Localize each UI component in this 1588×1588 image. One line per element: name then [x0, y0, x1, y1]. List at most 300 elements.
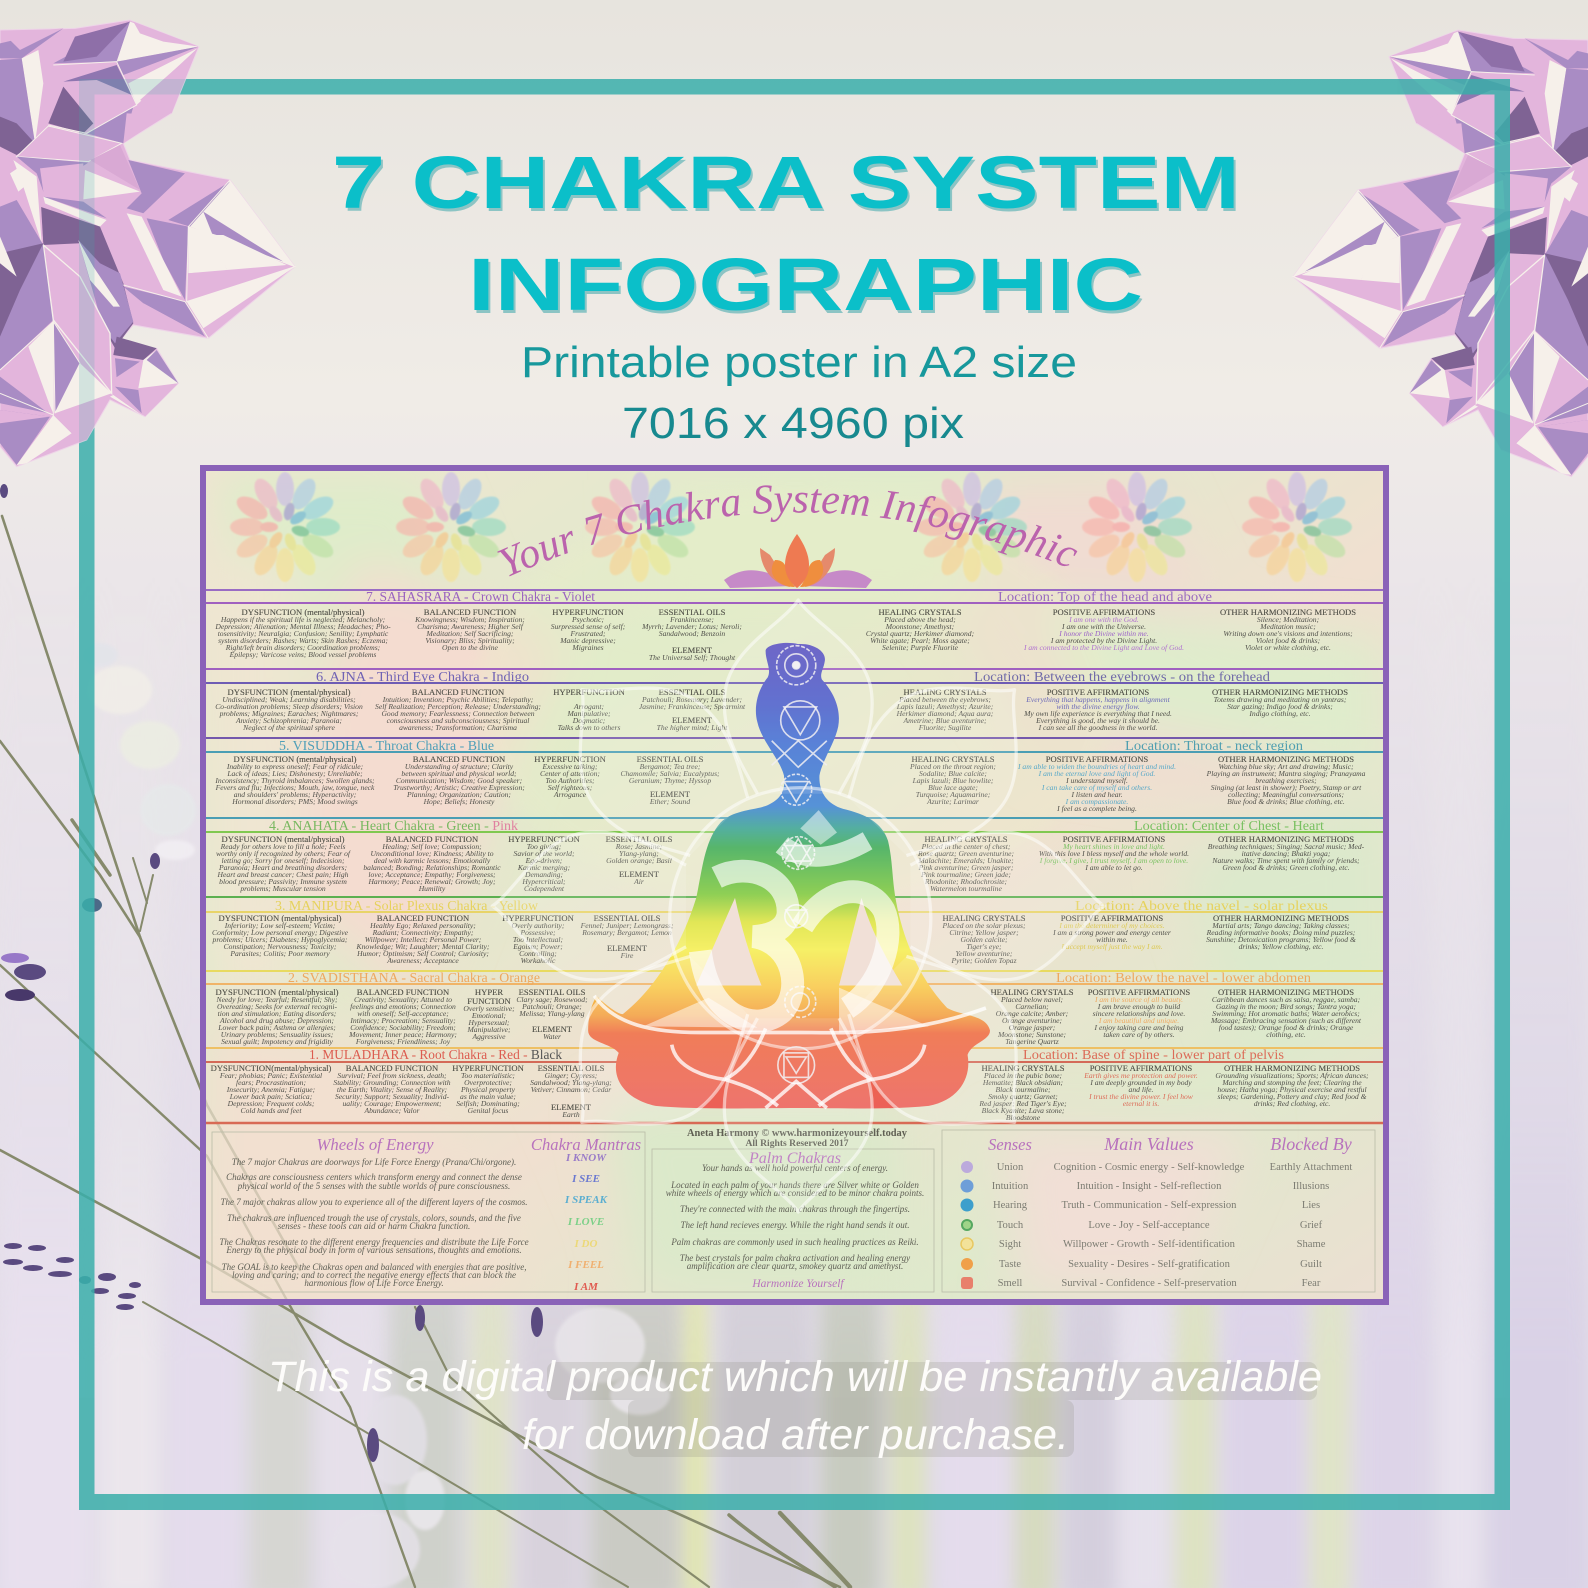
section 1 text: HYPERFUNCTION [452, 1063, 525, 1073]
chakra row icons [960, 1161, 974, 1289]
section 7 text: Sandalwood; Benzoin [659, 629, 725, 638]
panel: senses, values, blocks table: Hearing [993, 1200, 1028, 1211]
section 5 text: I am compassionate. [1065, 797, 1128, 806]
section 3 text: Rosemary; Bergamot; Lemon [581, 928, 672, 937]
subtitle: Printable poster in A2 size [521, 338, 1077, 387]
section headings: 2. SVADISTHANA - Sacral Chakra - Orange [288, 970, 540, 985]
section 6 text: POSITIVE AFFIRMATIONS [1047, 687, 1149, 697]
section 2 text: Carnelian; [1015, 1002, 1049, 1011]
section 7 text: I am protected by the Divine Light. [1050, 636, 1157, 645]
section 2 text: Moonstone; Sunstone; [997, 1030, 1067, 1039]
section 3 text: Pyrite; Golden Topaz [950, 956, 1017, 965]
section 2 text: HEALING CRYSTALS [990, 987, 1074, 997]
section 5 text: DYSFUNCTION (mental/physical) [234, 754, 357, 764]
panel: palm chakras: amplification are clear quartz, smokey quartz and amethyst. [687, 1261, 903, 1271]
panel: senses, values, blocks table: Blocked By [1270, 1134, 1352, 1154]
section 4 text: blood pressure; Passivity; Immune system [219, 877, 347, 886]
panel: palm chakras: Palm Chakras [748, 1150, 841, 1167]
section headings: Location: Between the eyebrows - on the forehead [974, 669, 1270, 684]
section 3 text: I accept myself just the way I am. [1060, 942, 1163, 951]
panel: palm chakras: Located in each palm of your hands there are Silver white or Golden [670, 1180, 919, 1190]
panel: senses, values, blocks table: Cognition - Cosmic energy - Self-knowledge [1054, 1162, 1245, 1173]
section 6 text: Star gazing; Indigo food & drinks; [1227, 702, 1333, 711]
section 7 text: Depression; Alienation; Mental Illness; Headaches; Pho- [214, 622, 391, 631]
section 3 text: Humor; Optimism; Self Control; Curiosity; [356, 949, 489, 958]
panel: senses, values, blocks table: Sexuality - Desires - Self-gratification [1068, 1259, 1231, 1270]
section headings: Location: Below the navel - lower abdomen [1056, 970, 1311, 985]
section 2 text: Movement; Inner peace; Harmony; [348, 1030, 457, 1039]
section 1 text: the Earth; Vitality; Sense of Reality; [337, 1085, 448, 1094]
section headings: Location: Base of spine - lower part of pelvis [1023, 1047, 1284, 1062]
section 1 text: Cold hands and feet [241, 1106, 302, 1115]
section 4 text: Demanding; [524, 870, 563, 879]
section 6 text: Intuition; Invention; Psychic Abilities; Telepathy; [382, 695, 534, 704]
section 4 text: Rose; Jasmine; [615, 842, 663, 851]
section 4 text: itative dancing; Bhakti yoga; [1242, 849, 1331, 858]
lower lotus petals [594, 996, 986, 1108]
section 4 text: problems; Muscular tension [239, 884, 326, 893]
section 3 text: Overly authority; [512, 921, 565, 930]
panel: chakra mantras: I KNOW [565, 1152, 607, 1164]
section 1 text: eternal it is. [1123, 1099, 1159, 1108]
section 6 text: Co-ordination problems; Sleep disorders; Vision [215, 702, 363, 711]
section 1 text: Survival; Feel from sickness, death; [337, 1071, 447, 1080]
panel: palm chakras: They're connected with the main chakras through the fingertips. [680, 1204, 910, 1214]
section 7 text: Migraines [571, 643, 604, 652]
section 7 text: White agate; Pearl; Moss agate; [870, 636, 970, 645]
section 6 text: Totems drawing and meditating on yantras; [1214, 695, 1347, 704]
section 4 text: letting go; Sorry for oneself; Indecision; [222, 856, 345, 865]
section 5 text: Inability to express oneself; Fear of ridicule; [226, 762, 364, 771]
section 6 text: My own life experience is everything that I need. [1023, 709, 1172, 718]
section 6 text: Herkimer diamond; Aqua aura; [896, 709, 994, 718]
section 1 text: ELEMENT [551, 1102, 592, 1112]
section 2 text: taken care of by others. [1103, 1030, 1175, 1039]
section 1 text: POSITIVE AFFIRMATIONS [1090, 1063, 1192, 1073]
section headings: 3. MANIPURA - Solar Plexus Chakra - Yellow [275, 898, 538, 913]
section 2 text: Orange jasper; [1009, 1023, 1056, 1032]
section 2 text: Intimacy; Procreation; Sensuality; [349, 1016, 456, 1025]
figure silhouette [588, 643, 990, 1108]
section 1 text: Marching and stomping the feet; Clearing the [1221, 1078, 1362, 1087]
section 6 text: problems; Migraines; Earaches; Nightmares; [219, 709, 359, 718]
section 1 text: I trust the divine power. I feel how [1088, 1092, 1194, 1101]
section 2 text: I enjoy taking care and being [1094, 1023, 1184, 1032]
section 5 text: HYPERFUNCTION [534, 754, 607, 764]
section 5 text: I am the eternal love and light of God. [1038, 769, 1155, 778]
section 7 text: Violet or white clothing, etc. [1245, 643, 1331, 652]
section 4 text: Humility [418, 884, 446, 893]
section 1 text: Fear; phobias; Panic; Existential [219, 1071, 322, 1080]
section 5 text: Bergamot; Tea tree; [640, 762, 701, 771]
subtitle: 7016 x 4960 pix [622, 399, 964, 448]
section 5 text: Blue lace agate; [928, 783, 978, 792]
section 2 text: Orange aventurine; [1002, 1016, 1063, 1025]
panel: senses, values, blocks table: Smell [998, 1278, 1022, 1289]
section 3 text: Sunshine; Detoxication programs; Yellow food & [1206, 935, 1356, 944]
section 3 text: Fire [620, 951, 634, 960]
panel: senses, values, blocks table: Shame [1297, 1239, 1326, 1250]
section 2 text: Lower back pain; Asthma or allergies; [217, 1023, 336, 1032]
section 2 text: Urinary problems; Sensuality issues; [221, 1030, 334, 1039]
section 1 text: Earth [561, 1110, 580, 1119]
bottom note: for download after purchase. [522, 1411, 1069, 1459]
section 7 text: Meditation; Self Sacrificing; [426, 629, 514, 638]
section 7 text: ELEMENT [672, 645, 713, 655]
section 6 text: ELEMENT [672, 715, 713, 725]
panel: wheels of energy: Wheels of Energy [316, 1135, 434, 1154]
section 4 text: Pink aventurine; Green jasper; [918, 863, 1014, 872]
section 5 text: I can take care of myself and others. [1041, 783, 1152, 792]
section 4 text: Rose quartz; Green aventurine; [917, 849, 1015, 858]
section 5 text: Self righteous; [548, 783, 593, 792]
section 7 text: Frustrated; [569, 629, 606, 638]
section 4 text: ELEMENT [619, 869, 660, 879]
section 2 text: Hypersexual; [468, 1018, 510, 1027]
section 1 text: Ginger; Cypress; [545, 1071, 598, 1080]
section 2 text: Creativity; Sexuality; Attuned to [354, 995, 452, 1004]
section 2 text: I am the source of all beauty. [1094, 995, 1183, 1004]
section 1 text: Smoky quartz; Garnet; [988, 1092, 1058, 1101]
section 1 text: DYSFUNCTION(mental/physical) [211, 1063, 332, 1073]
section 2 text: Gazing in the moon; Bird songs; Tantra yoga; [1216, 1002, 1357, 1011]
section 4 text: ESSENTIAL OILS [606, 834, 673, 844]
panel: wheels of energy: Chakras are consciousness centers which transform energy and connect the dense [226, 1172, 522, 1182]
section headings [269, 589, 1328, 1062]
section 2 text: POSITIVE AFFIRMATIONS [1088, 987, 1190, 997]
panel: senses, values, blocks table: Love - Joy - Self-acceptance [1088, 1220, 1210, 1231]
section 3 text: Workaholic [521, 956, 556, 965]
section 7 text: Selenite; Purple Fluorite [882, 643, 959, 652]
panel: senses, values, blocks table: Sight [999, 1239, 1021, 1250]
section 1 text: Selfish; Dominating; [456, 1099, 520, 1108]
section 2 text: OTHER HARMONIZING METHODS [1218, 987, 1354, 997]
icon: om symbol [700, 841, 888, 1021]
section 3 text: ELEMENT [607, 943, 648, 953]
section 7 text: I am connected to the Divine Light and Love of God. [1023, 643, 1184, 652]
section 2 text: Overly sensitive; [463, 1004, 515, 1013]
section 1 text: Red jasper; Red Tiger's Eye; [978, 1099, 1067, 1108]
section 2 text: Massage; Embracing sensation (such as different [1210, 1016, 1362, 1025]
section 2 text: Emotional; [471, 1011, 507, 1020]
section 1 text: Vetiver; Cinnamon; Cedar [531, 1085, 611, 1094]
lavender stems [0, 516, 850, 1587]
panel: wheels of energy: The Chakras resonate to the different energy frequencies and distribute the Life Force [219, 1237, 529, 1247]
panel: senses, values, blocks table [942, 1130, 1375, 1292]
section 3 text: Conformity; Low personal energy; Digestive [212, 928, 349, 937]
section 3 text: BALANCED FUNCTION [377, 913, 470, 923]
panel: senses, values, blocks table: Truth - Communication - Self-expression [1062, 1200, 1237, 1211]
panel: senses, values, blocks table: Survival - Confidence - Self-preservation [1061, 1278, 1237, 1289]
section 4 text: worthy only if recognized by others; Fear of [216, 849, 351, 858]
section 4 text: Malachite; Emeralds; Unakite; [917, 856, 1014, 865]
section 7 text: OTHER HARMONIZING METHODS [1220, 607, 1356, 617]
section 3 text: Too Intellectual; [513, 935, 564, 944]
section 2 text: tion and stimulation; Eating disorders; [218, 1009, 337, 1018]
section 5 text: Excessive talking; [541, 762, 598, 771]
header flowers [230, 472, 1352, 582]
panel: senses, values, blocks table: Intuition [992, 1181, 1029, 1192]
section 1 text: Placed in the pubic bone; [983, 1071, 1062, 1080]
section 3 text: Martial arts; Tango dancing; Taking classes; [1211, 921, 1350, 930]
section 2 text: Orange calcite; Amber; [996, 1009, 1069, 1018]
panel: chakra mantras: I LOVE [567, 1216, 604, 1228]
section 6 text: Dogmatic; [572, 716, 606, 725]
section 3 text: within me. [1096, 935, 1128, 944]
section 6 text: Everything is good, the way it should be. [1035, 716, 1160, 725]
section 7 text: BALANCED FUNCTION [424, 607, 517, 617]
subtitle [521, 338, 1077, 448]
section 4 text: Ego-driven; [525, 856, 563, 865]
section 4 text: With this love I bless myself and the whole world. [1039, 849, 1189, 858]
section 1 text: BALANCED FUNCTION [346, 1063, 439, 1073]
section 3 text: Radiant; Connectivity; Empathy; [372, 928, 474, 937]
section 1 text: uality; Courage; Empowerment; [342, 1099, 442, 1108]
section 1 text: Overprotective; [464, 1078, 512, 1087]
section 6 text: Fluorite; Sugilite [918, 723, 972, 732]
section 2 text: sincere relationships and love. [1093, 1009, 1185, 1018]
title: 7 CHAKRA SYSTEM [334, 144, 1242, 227]
section 7 text: ESSENTIAL OILS [659, 607, 726, 617]
section 4 text: DYSFUNCTION (mental/physical) [222, 834, 345, 844]
section 6 text: Placed between the eyebrows; [898, 695, 991, 704]
section 5 text: Sodalite; Blue calcite; [919, 769, 987, 778]
section 5 text: ELEMENT [650, 789, 691, 799]
crystal cluster top right [1293, 30, 1588, 477]
section 4 text: Paranoia; Heart and breathing disorders; [218, 863, 348, 872]
section headings: 6. AJNA - Third Eye Chakra - Indigo [316, 669, 529, 684]
section 7 text: Knowingness; Wisdom; Inspiration; [414, 615, 525, 624]
section 5 text: ESSENTIAL OILS [637, 754, 704, 764]
section 2 text: Needy for love; Tearful; Resentful; Shy; [216, 995, 338, 1004]
section 2 text: Aggressive [471, 1032, 506, 1041]
panel: wheels of energy: physical world of the 5 senses with the subtle worlds of pure consciousness. [237, 1181, 510, 1191]
section 2 text: FUNCTION [467, 996, 512, 1006]
section 1 text: Earth gives me protection and power. [1083, 1071, 1198, 1080]
section 5 text: I am able to widen the boundries of heart and mind. [1017, 762, 1176, 771]
section 5 text: Ether; Sound [649, 797, 690, 806]
section 7 text: Epilepsy; Varicose veins; Blood vessel problems [229, 650, 376, 659]
panel: senses, values, blocks table: Illusions [1293, 1181, 1329, 1192]
background: paper and lavender field [0, 759, 1588, 1588]
section 5 text: BALANCED FUNCTION [413, 754, 506, 764]
section 2 text: I am brave enough to build [1097, 1002, 1180, 1011]
bottom note shadow [547, 1362, 1317, 1457]
section 7 text: POSITIVE AFFIRMATIONS [1053, 607, 1155, 617]
section 7 text [214, 607, 1356, 662]
section 4 text: Nature walks; Time spent with family or friends; [1211, 856, 1360, 865]
panel: senses, values, blocks table: Willpower - Growth - Self-identification [1063, 1239, 1236, 1250]
panel: senses, values, blocks table: Intuition - Insight - Self-reflection [1077, 1181, 1222, 1192]
title: INFOGRAPHIC [470, 246, 1145, 329]
section 1 text: Insecurity; Anemia; Fatigue; [226, 1085, 316, 1094]
section 6 text: Arrogant; [573, 702, 605, 711]
section 7 text: Psychotic; [571, 615, 604, 624]
section 2 text: Melissa; Ylang-ylang [518, 1009, 585, 1018]
section 7 text: HEALING CRYSTALS [878, 607, 962, 617]
section 4 text: Unconditional love; Kindness; Ability to [370, 849, 494, 858]
section headings: Location: Throat - neck region [1125, 738, 1303, 753]
section 1 text: drinks; Red clothing, etc. [1254, 1099, 1330, 1108]
section 3 text: Fennel; Juniper; Lemongrass; [580, 921, 674, 930]
section 3 text [212, 913, 1356, 965]
section 2 text: ESSENTIAL OILS [519, 987, 586, 997]
section 6 text: Lapis lazuli; Amethyst; Azurite; [896, 702, 994, 711]
section 4 text: BALANCED FUNCTION [386, 834, 479, 844]
section 2 text: Forgiveness; Friendliness; Joy [355, 1037, 451, 1046]
section 3 text: Golden calcite; [960, 935, 1008, 944]
section 3 text: Constipation; Nervousness; Toxicity; [224, 942, 337, 951]
section 5 text: I feel as a complete being. [1056, 804, 1137, 813]
section 5 text: and shoulders' problems; Hyperactivity; [234, 790, 357, 799]
section 7 text: I am one with the Universe. [1061, 622, 1146, 631]
panel: wheels of energy: The chakras are influenced trough the use of crystals, colors, sounds, and the five [227, 1213, 521, 1223]
section 5 text [214, 754, 1366, 813]
section 3 text: problems; Ulcers; Diabetes; Hypoglycemia; [212, 935, 348, 944]
section headings: Location: Center of Chest - Heart [1134, 818, 1324, 833]
title [332, 141, 1242, 329]
section 3 text: Controlling; [519, 949, 557, 958]
section 3 text: Placed on the solar plexus; [941, 921, 1026, 930]
icon: lotus [724, 534, 872, 588]
section 4 text: POSITIVE AFFIRMATIONS [1063, 834, 1165, 844]
poster preview [200, 465, 1389, 1305]
section 7 text: I honor the Divine within me. [1058, 629, 1149, 638]
section 2 text: BALANCED FUNCTION [357, 987, 450, 997]
section 7 text: Writing down one's visions and intentions; [1223, 629, 1353, 638]
section 7 text: Open to the divine [442, 643, 499, 652]
section 4 text: Too giving; [527, 842, 562, 851]
panel: chakra mantras: I AM [573, 1281, 599, 1293]
section 2 text: Confidence; Sociability; Freedom; [350, 1023, 456, 1032]
section headings: 7. SAHASRARA - Crown Chakra - Violet [366, 589, 595, 604]
section 5 text: Fevers and flu; Infections; Mouth, jaw, tongue, neck [215, 783, 375, 792]
panel: palm chakras: Palm chakras are commonly used in such healing practices as Reiki. [670, 1237, 919, 1247]
section 5 text: Inconsistency; Thyroid imbalances; Swollen glands; [214, 776, 375, 785]
section 6 text: Ametrine; Blue aventurine; [902, 716, 987, 725]
section 1 text: Lower back pain; Sciatica; [229, 1092, 313, 1101]
panel: senses, values, blocks table: Touch [997, 1220, 1024, 1231]
section 4 text: OTHER HARMONIZING METHODS [1218, 834, 1354, 844]
section 5 text: Understanding of structure; Clarity [405, 762, 514, 771]
panel: palm chakras: All Rights Reserved 2017 [745, 1138, 849, 1149]
section 2 text: Placed below navel; [1000, 995, 1063, 1004]
section 5 text: Lapis lazuli; Blue howlite; [912, 776, 994, 785]
section 4 text: Hypercritical; [521, 877, 566, 886]
section 5 text: between spiritual and physical world; [401, 769, 517, 778]
section 4 text: Watermelon tourmaline [930, 884, 1002, 893]
section 5 text: Playing an instrument; Mantra singing; Pranayama [1206, 769, 1366, 778]
section 2 text: Clary sage; Rosewood; [516, 995, 588, 1004]
section 2 text: ELEMENT [532, 1024, 573, 1034]
panel: palm chakras: white wheels of energy which are considered to be minor chakra points. [666, 1188, 924, 1198]
section 3 text: I am a strong power and energy center [1052, 928, 1171, 937]
section 3 text: Awareness; Acceptance [386, 956, 459, 965]
section 6 text: Anxiety; Schizophrenia; Paranoia; [235, 716, 342, 725]
section 3 text: HEALING CRYSTALS [942, 913, 1026, 923]
section 1 text: Stability; Grounding; Connection with [333, 1078, 451, 1087]
section 1 text: OTHER HARMONIZING METHODS [1224, 1063, 1360, 1073]
section 3 text: Willpower; Intellect; Personal Power; [365, 935, 482, 944]
section 1 text: Grounding visualizations; Sports; African dances; [1215, 1071, 1369, 1080]
section 6 text: Talks down to others [558, 723, 620, 732]
section 4 text: Golden orange; Basil [606, 856, 672, 865]
section 7 text: Manic depressive; [559, 636, 616, 645]
section 6 text: Self Realization; Perception; Release; Understanding; [375, 702, 541, 711]
panel: wheels of energy: senses - these tools can aid or harm Chakra function. [278, 1221, 470, 1231]
bottom note [268, 1353, 1322, 1459]
section 1 text: Hematite; Black obsidian; [982, 1078, 1064, 1087]
panel: senses, values, blocks table: Lies [1302, 1200, 1320, 1211]
section 5 text: Center of attention; [540, 769, 600, 778]
section 3 text: I am the determiner of my choices. [1058, 921, 1165, 930]
section 3 text: Egoism; Power; [512, 942, 563, 951]
section 7 text: I am one with the God. [1068, 615, 1139, 624]
section 7 text: Placed above the head; [883, 615, 956, 624]
section 1 text: Too materialistic; [461, 1071, 515, 1080]
section 5 text: Planning; Organization; Caution; [406, 790, 511, 799]
title: INFOGRAPHIC [468, 243, 1143, 326]
section 2 text [216, 987, 1362, 1046]
section 3 text: Tiger's eye; [966, 942, 1002, 951]
section 7 text: Silence; Meditation; [1257, 615, 1320, 624]
section 2 text: Caribbean dances such as salsa, reggae, samba; [1212, 995, 1361, 1004]
section 4 text: Heart and breast cancer; Chest pain; High [217, 870, 349, 879]
section 6 text: Everything that happens, happens in alignment [1025, 695, 1171, 704]
section 1 text: ESSENTIAL OILS [538, 1063, 605, 1073]
section 6 text: I can see all the goodness in the world. [1038, 723, 1157, 732]
section 5 text: Communication; Wisdom; Good speaker; [396, 776, 523, 785]
section 1 text: Bloodstone [1006, 1113, 1041, 1122]
section 6 text: Manipulative; [566, 709, 611, 718]
panel: wheels of energy [212, 1132, 645, 1292]
panel: senses, values, blocks table: Union [997, 1162, 1024, 1173]
section 5 text: collecting; Meaningful conversations; [1228, 790, 1344, 799]
section 3 text: Knowledge; Wit; Laughter; Mental Clarity; [356, 942, 490, 951]
poster script title: Your 7 Chakra System Infographic [497, 485, 1078, 576]
section 4 text: Ready for others love to fill a hole; Feels [220, 842, 345, 851]
panel: senses, values, blocks table: Senses [988, 1135, 1032, 1154]
section 6 text: Jasmine; Frankincense; Spearmint [639, 702, 746, 711]
section 7 text: DYSFUNCTION (mental/physical) [242, 607, 365, 617]
panel: wheels of energy: harmonious flow of Life Force Energy. [304, 1278, 444, 1288]
section 5 text: OTHER HARMONIZING METHODS [1218, 754, 1354, 764]
section 4 text: Karmic merging; [517, 863, 571, 872]
pale blossoms [82, 643, 670, 1588]
section 3 text: POSITIVE AFFIRMATIONS [1061, 913, 1163, 923]
section 5 text: Singing (at least in shower); Poetry, Stamp or art [1211, 783, 1362, 792]
panel: senses, values, blocks table: Taste [999, 1259, 1021, 1270]
panel: wheels of energy: The 7 major Chakras are doorways for Life Force Energy (Prana/Chi/orgone). [232, 1157, 516, 1167]
section headings: 4. ANAHATA - Heart Chakra - Green - Pink [269, 818, 518, 833]
section 5 text: Geranium; Thyme; Hyssop [629, 776, 711, 785]
panel: chakra mantras: I FEEL [567, 1259, 604, 1271]
panel: senses, values, blocks table: Main Values [1103, 1134, 1194, 1154]
section 1 text [211, 1063, 1369, 1122]
panel: chakra mantras: I SEE [571, 1173, 600, 1185]
section 6 text [215, 687, 1348, 732]
panel: chakra mantras: I SPEAK [564, 1194, 608, 1206]
section 1 text: Black Kyanite; Lava stone; [982, 1106, 1065, 1115]
section 7 text: Surpressed sense of self; [551, 622, 626, 631]
section 3 text: Parasites; Colitis; Poor memory [229, 949, 330, 958]
section 4 text: I forgive, I give, I trust myself. I am open to love. [1039, 856, 1188, 865]
section 5 text: POSITIVE AFFIRMATIONS [1046, 754, 1148, 764]
section 2 text: Sexual guilt; Impotency and frigidity [221, 1037, 334, 1046]
section 5 text: I listen and hear. [1070, 790, 1123, 799]
section 5 text: Trustworthy; Artistic; Creative Expression; [393, 783, 525, 792]
panel: palm chakras: Your hands as well hold powerful centers of energy. [702, 1163, 888, 1173]
